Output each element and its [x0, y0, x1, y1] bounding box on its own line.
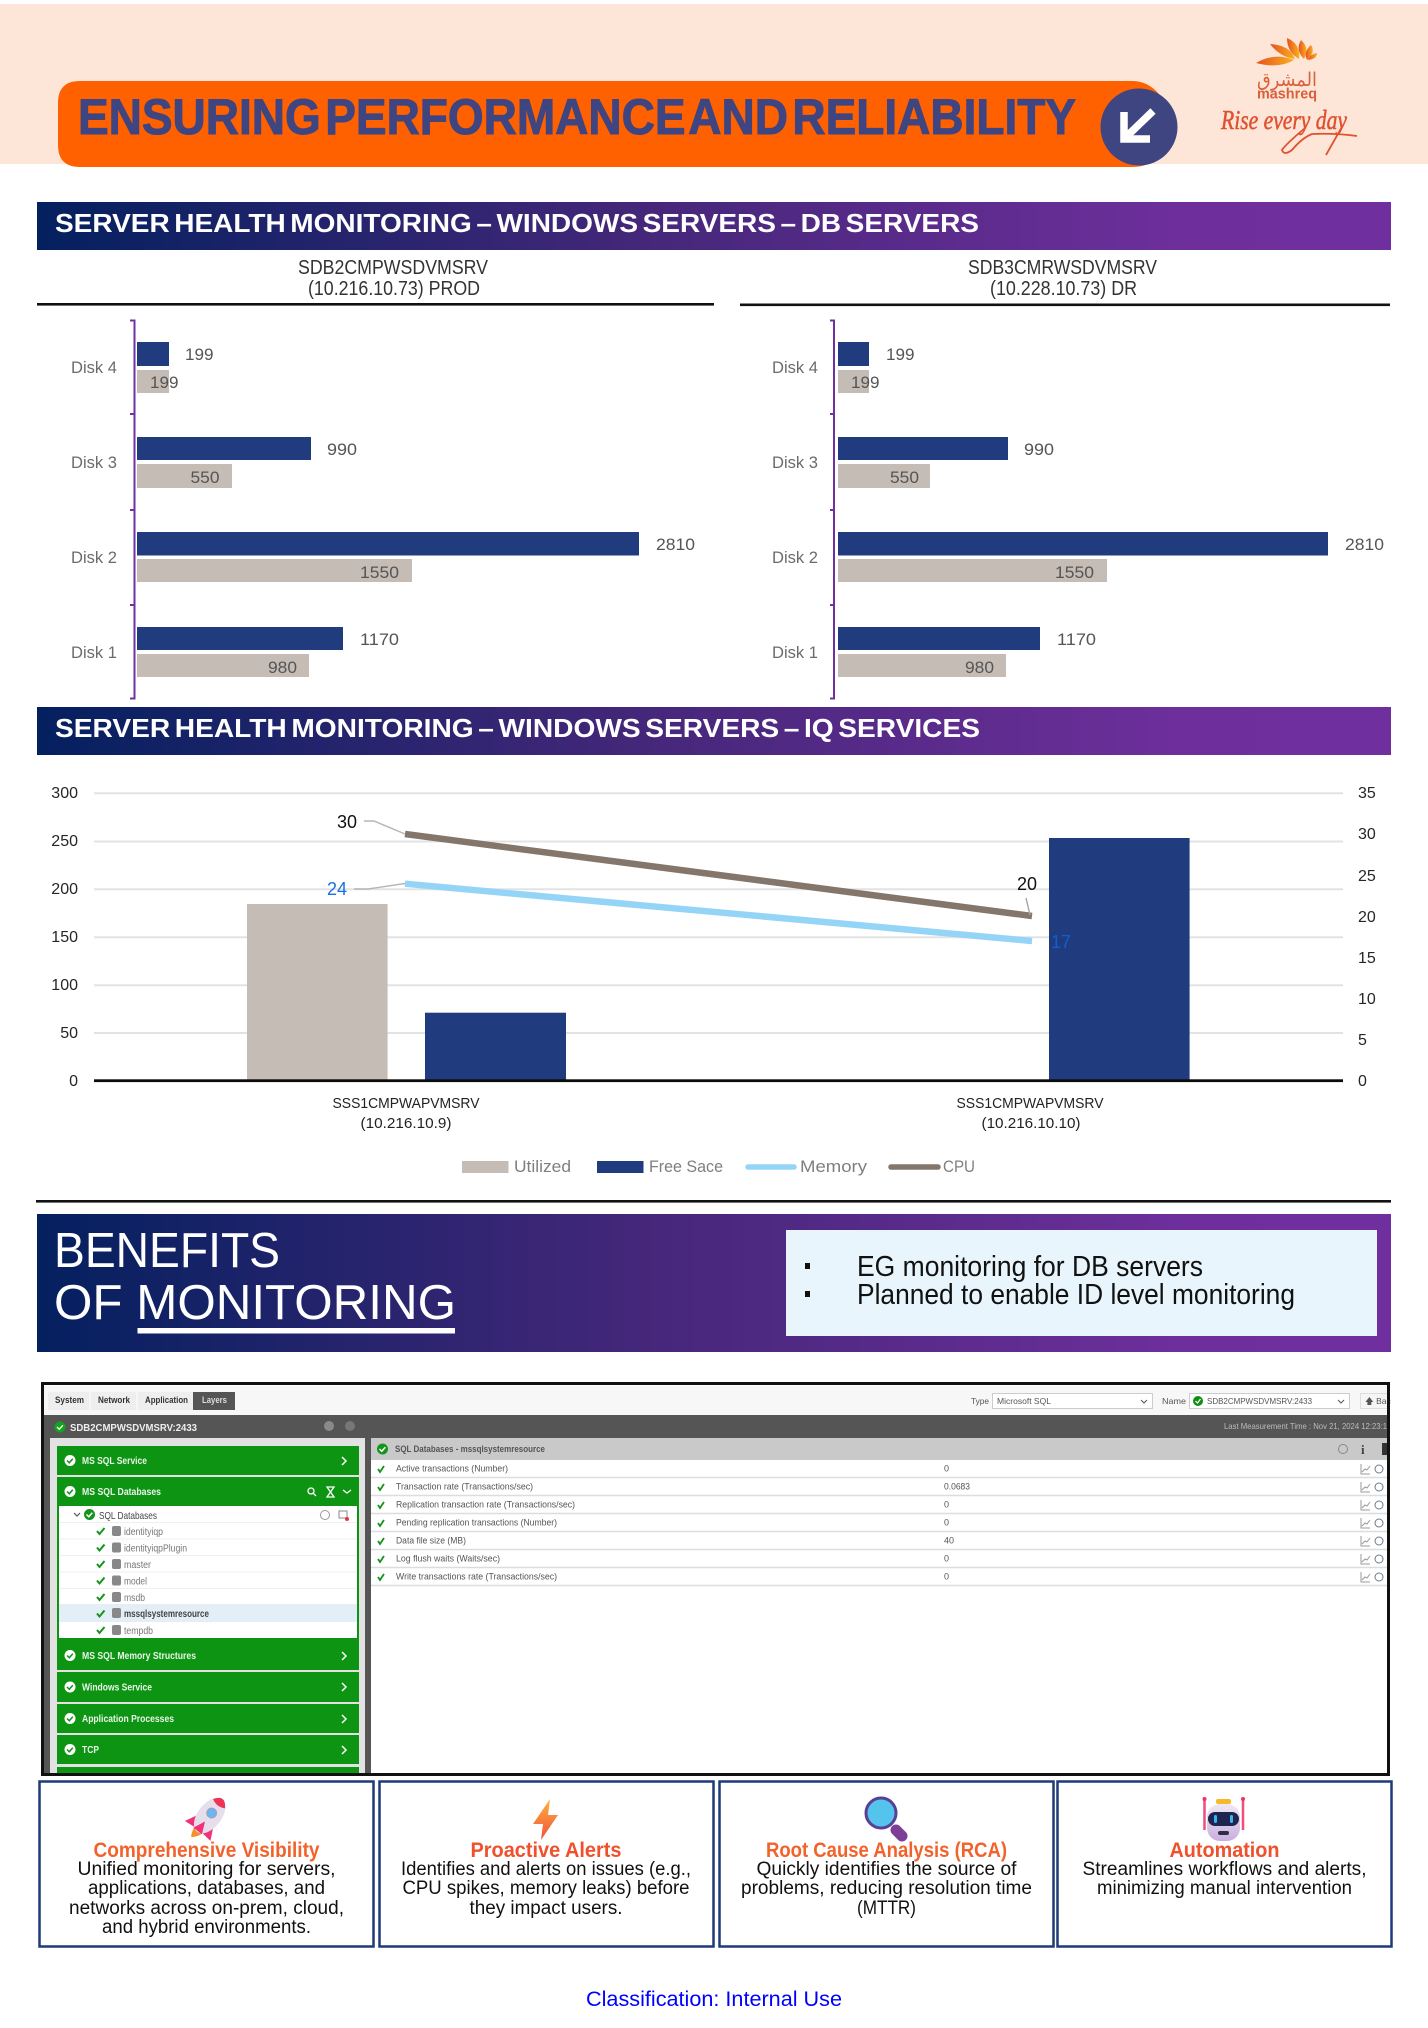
- disk 3 bars: 990: [1024, 440, 1054, 459]
- description: they impact users.: [470, 1898, 622, 1919]
- legend: Free Sace: [649, 1157, 723, 1176]
- tagline swash: [1282, 125, 1357, 155]
- tabs: Layers: [202, 1395, 227, 1406]
- server label: prod: (10.216.10.73) PROD: [308, 278, 480, 300]
- legend: Utilized: [514, 1157, 571, 1176]
- disk 2 bars: [772, 532, 1384, 582]
- section header: DB servers: SERVER HEALTH MONITORING – WINDOWS SERVERS – DB SERVERS: [55, 208, 979, 238]
- tree: databases: model: [124, 1576, 147, 1588]
- data labels: 17: [1051, 932, 1071, 952]
- header background: [0, 4, 1428, 164]
- tree: databases: identityiqpPlugin: [124, 1544, 187, 1554]
- right axis: 30: [1358, 826, 1376, 843]
- right axis: [1358, 785, 1376, 1090]
- description: [741, 1859, 1032, 1919]
- disk 2 bars: 2810: [1345, 535, 1384, 554]
- disk 4 bars: 199: [851, 373, 880, 392]
- disk 1 bars: 980: [268, 658, 297, 677]
- tree: databases: identityiqp: [124, 1527, 163, 1538]
- tagline: Rise every day: [1220, 105, 1347, 135]
- card: comprehensive visibility: [40, 1782, 374, 1946]
- measurement table: 0: [944, 1572, 949, 1582]
- tabs: Network: [98, 1395, 131, 1406]
- category labels: [332, 1095, 1104, 1132]
- data labels: 20: [1017, 874, 1037, 894]
- logo: mashreq: [1220, 38, 1357, 155]
- icon: magnifier: [866, 1798, 902, 1836]
- disk 2 bars: Disk 2: [772, 548, 818, 567]
- wordmark: mashreq: [1257, 86, 1317, 102]
- heading: Comprehensive Visibility: [94, 1839, 320, 1862]
- description: [1082, 1859, 1366, 1899]
- disk 2 bars: Disk 2: [71, 548, 117, 567]
- section header: DB servers: [37, 202, 1391, 250]
- disk 3 bars: Disk 3: [772, 453, 818, 472]
- description: [69, 1859, 344, 1938]
- disk 3 bars: 550: [190, 468, 220, 487]
- layer: TCP: [57, 1735, 359, 1764]
- bar chart: prod disks: [71, 320, 695, 698]
- description: Identifies and alerts on issues (e.g.,: [401, 1859, 691, 1880]
- left axis: 0: [69, 1073, 78, 1090]
- status bar: Last Measurement Time : Nov 21, 2024 12:23:1: [1224, 1421, 1387, 1431]
- disk 1 bars: 1170: [360, 630, 399, 649]
- disk 1 bars: Disk 1: [772, 643, 818, 662]
- heading: OF MONITORING: [54, 1276, 456, 1330]
- disk 4 bars: [772, 342, 914, 393]
- layer: Windows Service: Windows Service: [82, 1682, 152, 1694]
- type and name selectors: Name: [1162, 1396, 1186, 1406]
- disk 2 bars: 1550: [360, 563, 399, 582]
- description: CPU spikes, memory leaks) before: [402, 1878, 690, 1899]
- bar chart: DR disks: [772, 320, 1384, 698]
- disk 3 bars: 990: [327, 440, 357, 459]
- measurement table: 0: [944, 1500, 949, 1510]
- heading: Proactive Alerts: [470, 1839, 622, 1862]
- type and name selectors: SDB2CMPWSDVMSRV:2433: [1207, 1396, 1312, 1406]
- title: ENSURING PERFORMANCE AND RELIABILITY: [78, 89, 1076, 145]
- right axis: 15: [1358, 950, 1376, 967]
- disk 1 bars: [71, 627, 399, 677]
- category labels: (10.216.10.10): [982, 1115, 1080, 1132]
- measurement table: 40: [944, 1536, 954, 1546]
- right axis: 10: [1358, 991, 1376, 1008]
- line: CPU: [405, 834, 1032, 916]
- tabs: System: [55, 1395, 84, 1406]
- left axis: 100: [51, 977, 78, 994]
- server label: DR: [968, 257, 1158, 300]
- description: networks across on-prem, cloud,: [69, 1898, 344, 1919]
- data labels: 24: [327, 879, 347, 899]
- disk 4 bars: Disk 4: [772, 358, 818, 377]
- heading: Root Cause Analysis (RCA): [766, 1839, 1007, 1862]
- description: [401, 1859, 691, 1919]
- type and name selectors: Microsoft SQL: [997, 1396, 1051, 1406]
- callout: Planned to enable ID level monitoring: [857, 1279, 1295, 1311]
- disk 3 bars: 550: [890, 468, 919, 487]
- layer: MS SQL Memory Structures: [57, 1641, 359, 1670]
- arabic wordmark: المشرق: [1257, 70, 1317, 91]
- measurement table: [371, 1438, 1388, 1586]
- tabs: Application: [145, 1395, 188, 1406]
- measurement table: SQL Databases - mssqlsystemresource: [395, 1444, 545, 1454]
- right axis: 35: [1358, 785, 1376, 802]
- measurement table: Pending replication transactions (Number): [396, 1518, 557, 1528]
- section header: IQ services: [37, 707, 1391, 755]
- disk 2 bars: [71, 532, 695, 582]
- measurement table: i: [1361, 1442, 1365, 1457]
- left axis: 50: [60, 1025, 78, 1042]
- layer: TCP: TCP: [82, 1745, 99, 1756]
- disk 4 bars: 199: [185, 345, 214, 364]
- right axis: 0: [1358, 1073, 1367, 1090]
- measurement table: Transaction rate (Transactions/sec): [396, 1482, 533, 1492]
- tree: SQL Databases: [74, 1509, 349, 1522]
- layer: MS SQL Service: MS SQL Service: [82, 1456, 147, 1467]
- description: Streamlines workflows and alerts,: [1082, 1859, 1366, 1880]
- measurement table: 0.0683: [944, 1482, 970, 1492]
- disk 3 bars: [772, 437, 1054, 488]
- disk 4 bars: 199: [150, 373, 178, 392]
- tree: databases: tempdb: [124, 1626, 153, 1637]
- icon: rocket: [180, 1789, 235, 1848]
- layer: MS SQL Databases: [57, 1477, 359, 1641]
- data labels: [327, 812, 1071, 952]
- description: Unified monitoring for servers,: [78, 1859, 336, 1880]
- footer: classification: Classification: Internal Use: [586, 1988, 842, 2011]
- card: proactive alerts: [380, 1782, 714, 1946]
- description: applications, databases, and: [88, 1878, 325, 1899]
- screenshot: monitoring console: [41, 1382, 1391, 1776]
- type and name selectors: Type: [971, 1396, 989, 1406]
- disk 4 bars: [71, 342, 214, 393]
- combo chart: IQ services: [51, 785, 1376, 1176]
- icon: robot: [1202, 1797, 1245, 1841]
- description: problems, reducing resolution time: [741, 1878, 1032, 1899]
- legend: CPU: [943, 1157, 975, 1176]
- right axis: 20: [1358, 909, 1376, 926]
- layer list: [57, 1446, 359, 1775]
- data labels: 30: [337, 812, 357, 832]
- layer: MS SQL Memory Structures: MS SQL Memory Structures: [82, 1651, 196, 1662]
- type and name selectors: 🡅 Bac: [1365, 1396, 1391, 1406]
- card: root cause analysis: [720, 1782, 1054, 1946]
- measurement table: 0: [944, 1518, 949, 1528]
- disk 3 bars: Disk 3: [71, 453, 117, 472]
- icon: sun petals: [1256, 38, 1317, 65]
- heading: Automation: [1170, 1839, 1280, 1862]
- type and name selectors: [971, 1394, 1391, 1408]
- layer: Application Processes: [57, 1704, 359, 1733]
- disk 1 bars: Disk 1: [71, 643, 117, 662]
- tree: databases: [97, 1526, 209, 1637]
- server label: DR: SDB3CMRWSDVMSRV: [968, 257, 1158, 279]
- layer: Application Processes: Application Processes: [82, 1714, 174, 1725]
- description: minimizing manual intervention: [1097, 1878, 1352, 1899]
- measurement table: 0: [944, 1554, 949, 1564]
- tree: databases: msdb: [124, 1593, 145, 1604]
- panel: benefits of monitoring banner: [37, 1214, 1391, 1352]
- description: and hybrid environments.: [102, 1917, 311, 1938]
- description: (MTTR): [857, 1898, 916, 1919]
- status bar: SDB2CMPWSDVMSRV:2433: [70, 1422, 197, 1434]
- left axis: [51, 785, 78, 1090]
- measurement table: Data file size (MB): [396, 1536, 466, 1546]
- disk 1 bars: 980: [965, 658, 994, 677]
- icon: lightning bolt: [533, 1799, 558, 1840]
- measurement table: 0: [944, 1464, 949, 1474]
- category labels: (10.216.10.9): [360, 1115, 452, 1132]
- measurement table: Log flush waits (Waits/sec): [396, 1554, 500, 1564]
- title pill: [58, 81, 1178, 167]
- category labels: SSS1CMPWAPVMSRV: [332, 1095, 480, 1112]
- layer: MS SQL Service: [57, 1446, 359, 1475]
- tree: databases: master: [124, 1560, 152, 1571]
- server label: prod: [298, 257, 489, 300]
- tree: databases: mssqlsystemresource: [124, 1609, 209, 1620]
- legend: Memory: [800, 1157, 868, 1176]
- callout: EG monitoring for DB servers: [857, 1251, 1203, 1283]
- description: Quickly identifies the source of: [756, 1859, 1017, 1880]
- layer: Windows Service: [57, 1672, 359, 1702]
- measurement table: Active transactions (Number): [396, 1464, 508, 1474]
- left axis: 200: [51, 881, 78, 898]
- heading: BENEFITS: [54, 1224, 280, 1278]
- disk 3 bars: [71, 437, 357, 488]
- legend: [462, 1157, 975, 1176]
- layer: MS SQL Databases: MS SQL Databases: [82, 1487, 161, 1498]
- bars: [247, 838, 1190, 1080]
- left axis: 250: [51, 833, 78, 850]
- card: automation: [1058, 1782, 1392, 1946]
- icon: arrow down-left circle: [1100, 88, 1178, 166]
- right axis: 5: [1358, 1032, 1367, 1049]
- left axis: 300: [51, 785, 78, 802]
- server label: DR: (10.228.10.73) DR: [990, 278, 1137, 300]
- disk 1 bars: [772, 627, 1096, 677]
- category labels: SSS1CMPWAPVMSRV: [956, 1095, 1104, 1112]
- section header: IQ services: SERVER HEALTH MONITORING – WINDOWS SERVERS – IQ SERVICES: [55, 713, 980, 743]
- tabs: [48, 1392, 235, 1410]
- measurement table: Write transactions rate (Transactions/sec): [396, 1572, 557, 1582]
- disk 2 bars: 2810: [656, 535, 695, 554]
- server label: prod: SDB2CMPWSDVMSRV: [298, 257, 489, 279]
- left axis: 150: [51, 929, 78, 946]
- disk 4 bars: 199: [886, 345, 914, 364]
- disk 1 bars: 1170: [1057, 630, 1096, 649]
- measurement table: Replication transaction rate (Transactions/sec): [396, 1500, 575, 1510]
- callout: [786, 1230, 1377, 1336]
- tree: SQL Databases: SQL Databases: [99, 1510, 157, 1522]
- status bar: [44, 1415, 1388, 1438]
- right axis: 25: [1358, 868, 1376, 885]
- heading: [54, 1224, 456, 1334]
- line: memory: [405, 884, 1032, 941]
- disk 2 bars: 1550: [1055, 563, 1094, 582]
- disk 4 bars: Disk 4: [71, 358, 117, 377]
